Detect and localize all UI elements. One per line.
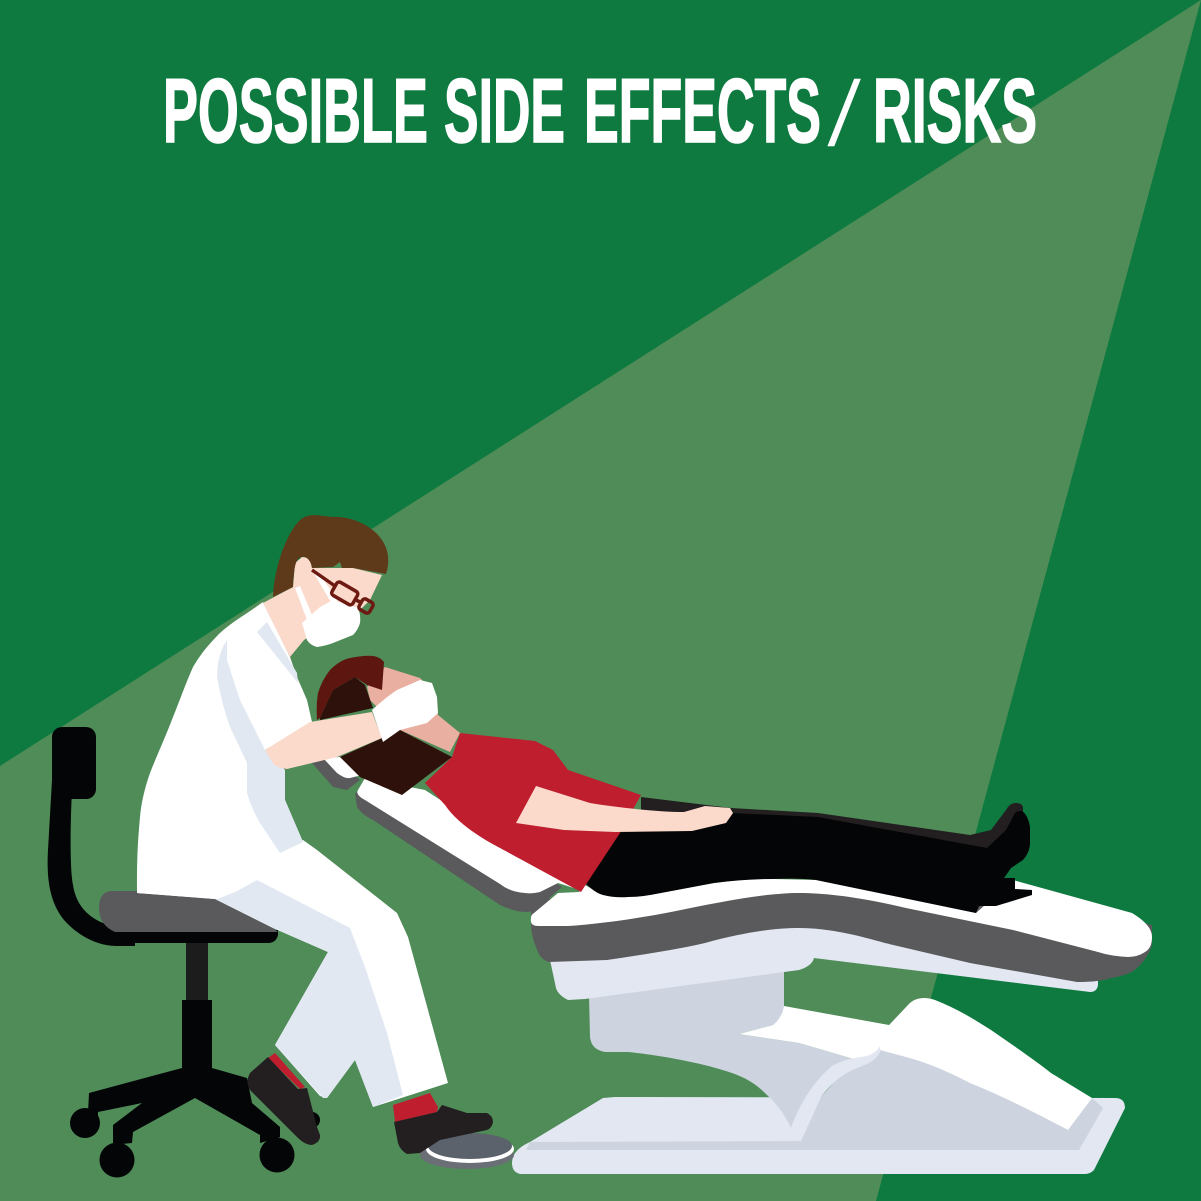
dentist front shoe bbox=[394, 1105, 493, 1154]
seat cushion edge bbox=[531, 880, 1152, 982]
dental chair bbox=[312, 755, 1152, 1174]
dentist glove bbox=[372, 680, 438, 742]
patient hair crown bbox=[317, 656, 384, 720]
stool casters bbox=[70, 1108, 320, 1178]
dentist arm bbox=[265, 712, 382, 769]
column white panel bbox=[739, 1006, 889, 1060]
dentist rear sock bbox=[268, 1053, 305, 1089]
coat shade bbox=[217, 622, 303, 853]
patient arm bbox=[516, 786, 733, 832]
dentist face and neck bbox=[263, 557, 382, 657]
backrest bbox=[357, 778, 580, 893]
patient hair bbox=[320, 677, 452, 795]
dentist front sock bbox=[393, 1093, 438, 1122]
foot pedal bbox=[420, 1133, 514, 1169]
patient shirt bbox=[425, 733, 641, 892]
title: POSSIBLE bbox=[163, 61, 428, 162]
title: SIDE bbox=[444, 61, 565, 162]
headrest bbox=[323, 757, 362, 778]
stool back support bbox=[48, 780, 135, 946]
seat underside bbox=[550, 920, 1098, 1000]
chair base plate bbox=[512, 1097, 1125, 1174]
seat cushion top bbox=[531, 879, 1152, 957]
face mask bbox=[302, 600, 360, 647]
chair base hump bbox=[880, 998, 1092, 1130]
dentist trousers bbox=[137, 840, 448, 1107]
title: / bbox=[825, 64, 863, 165]
title bbox=[163, 61, 1037, 165]
stool seat cushion bbox=[99, 891, 278, 932]
title: EFFECTS bbox=[584, 61, 821, 162]
stool back pad bbox=[52, 727, 96, 799]
title: RISKS bbox=[873, 61, 1037, 162]
dentist bbox=[137, 515, 493, 1154]
stool seat underside bbox=[107, 930, 278, 943]
curved light strip bbox=[791, 1046, 880, 1141]
stool column bbox=[186, 943, 208, 1001]
patient bbox=[317, 656, 1032, 913]
patient head bbox=[367, 667, 460, 752]
patient trousers bbox=[585, 811, 1032, 913]
chair column bbox=[589, 970, 857, 1128]
dentist hair bbox=[273, 515, 388, 597]
stool base bbox=[88, 1000, 280, 1145]
headrest shadow bbox=[312, 755, 360, 790]
patient upper leg bbox=[641, 797, 1023, 852]
mask straps bbox=[295, 570, 338, 620]
glasses bbox=[312, 570, 374, 614]
backrest shadow bbox=[355, 780, 562, 912]
dentist rear shoe bbox=[248, 1057, 320, 1145]
dentist stool bbox=[48, 727, 320, 1178]
dentist coat bbox=[137, 602, 312, 899]
base shadow region bbox=[526, 1045, 1103, 1150]
trousers shade bbox=[213, 863, 403, 1107]
